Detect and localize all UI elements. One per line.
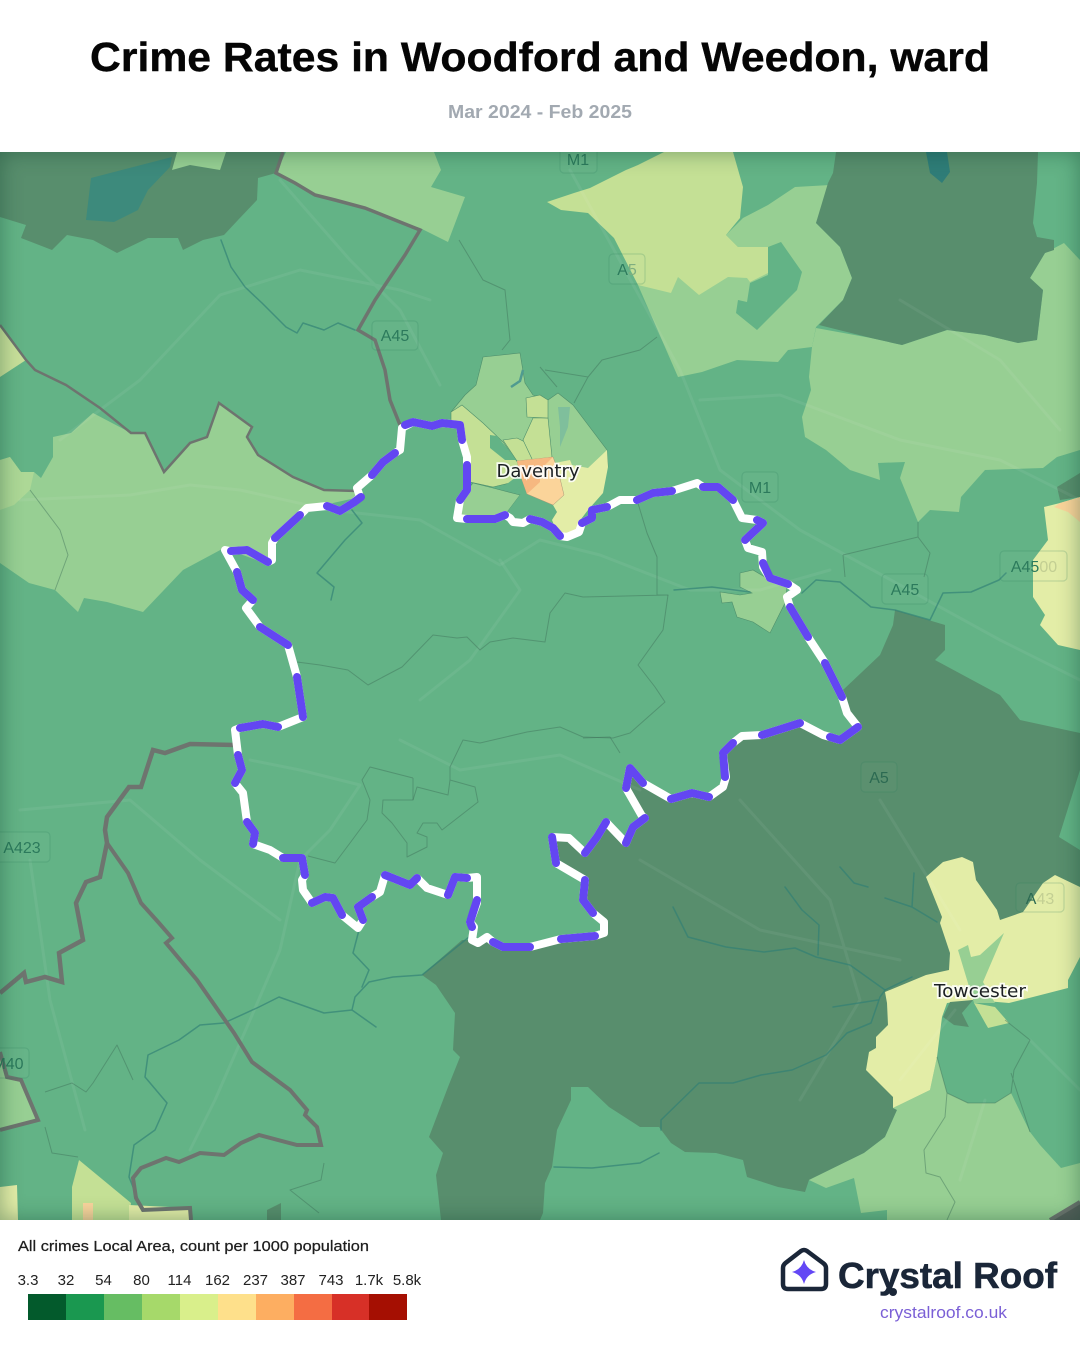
legend tick labels: 237 [243,1272,268,1289]
road label: A4500: A4500 [1011,559,1057,576]
brand name: Crystal Roof [838,1255,1058,1296]
county boundary: south-west B [107,843,321,1220]
icon: house with star [783,1250,826,1289]
road label: A45 east: A45 [891,582,919,599]
area: south small dark patch [267,1203,281,1220]
road label: A5 south [861,762,897,792]
area: Towcester inner yellow-green [974,1003,1009,1028]
road label: A45 west [372,321,418,350]
area: south-west pale strip [129,1205,190,1220]
area: Towcester inner light green [958,933,1004,1003]
area: Towcester inner dark [943,1000,973,1027]
road label: A423 [0,832,50,862]
area: north-east dark zone [816,152,1054,345]
road label: M1: M1 [749,480,771,497]
website: crystalroof.co.uk [880,1304,1008,1322]
water: reservoir north-west [86,157,172,222]
legend tick labels: 743 [318,1272,344,1289]
title: Crime Rates in Woodford and Weedon, ward [90,34,990,80]
legend [18,1238,422,1320]
road label: M1 north: M1 [567,152,589,169]
area: south-west peach [83,1203,93,1220]
area: south-east corner of neighbouring zone [1054,1204,1080,1220]
area: north light green [276,152,465,242]
county boundary: north [276,152,420,425]
area: north-centre light green [638,185,852,377]
county boundary: west [0,325,357,491]
county boundary: south-east corner [1050,1202,1080,1220]
rivers [129,240,1006,1207]
logo: Crystal Roof [783,1250,1058,1322]
area: south-east light green [809,1057,1080,1220]
legend tick labels: 5.8k [393,1272,422,1289]
legend tick labels: 54 [95,1272,112,1289]
area: left-edge yellow-green [0,325,26,377]
road label: M40 [0,1048,29,1078]
legend tick labels: 1.7k [355,1272,384,1289]
map edge vignette [0,152,1080,1220]
area: green enclave [736,242,802,330]
road label: M1 [742,472,778,502]
legend colour scale [28,1294,407,1320]
road label: A43 [1016,883,1064,912]
road label: A4500 [1000,551,1067,581]
legend heading: All crimes Local Area, count per 1000 population [18,1238,369,1255]
road label: A45 west: A45 [381,328,409,345]
county boundary: south-west A [0,744,235,993]
legend tick labels: 162 [205,1272,230,1289]
road label: A5 north [609,254,645,284]
thin area boundaries [30,240,1030,1220]
area: small light patch at top [172,152,226,170]
area: north-east light green [802,243,1080,522]
county boundary: far south-west [0,1052,38,1130]
area: north-west dark low-crime zone [0,152,283,253]
area: east-edge peach [1054,497,1080,522]
road label: M1 north [560,140,597,173]
road label: A5 north: A5 [617,262,637,279]
legend tick labels: 387 [280,1272,306,1289]
area: east-edge pale yellow [1033,497,1080,650]
legend tick labels: 80 [133,1272,150,1289]
area: south-west yellow-green [72,1160,131,1220]
legend tick labels: 32 [58,1272,74,1289]
ward outline: white boundary with purple dashes [225,422,858,947]
place label: Towcester: Towcester [933,982,1027,1002]
road label: A423: A423 [3,840,41,857]
place label: Daventry: Daventry [496,462,580,482]
area: south dark low-crime zone [422,610,1080,1220]
area: far-west lighter patch [0,457,34,510]
subtitle: date range: Mar 2024 - Feb 2025 [448,101,632,122]
area: patch near M1 [720,570,787,633]
area: Towcester inner green [987,1026,988,1028]
area: north-centre yellow-green [547,152,768,295]
area: south-west pale corner [0,1185,18,1220]
area: east-edge small dark patch [1057,473,1080,500]
area: south-west light pocket [0,1060,36,1128]
area: Towcester pale yellow [866,857,1080,1108]
road label: A5 south: A5 [869,770,889,787]
legend tick labels: 3.3 [18,1272,38,1289]
road label: A45 east [882,574,928,604]
area: west light green [0,403,360,612]
water: lake north-east [926,152,950,183]
road network [20,170,1080,1180]
road label: A43: A43 [1026,891,1054,908]
legend tick labels [18,1272,422,1289]
legend tick labels: 114 [168,1272,191,1289]
icon: keyhole on y descender [889,1288,897,1296]
choropleth map panel [0,140,1080,1220]
Daventry town areas [451,353,608,540]
